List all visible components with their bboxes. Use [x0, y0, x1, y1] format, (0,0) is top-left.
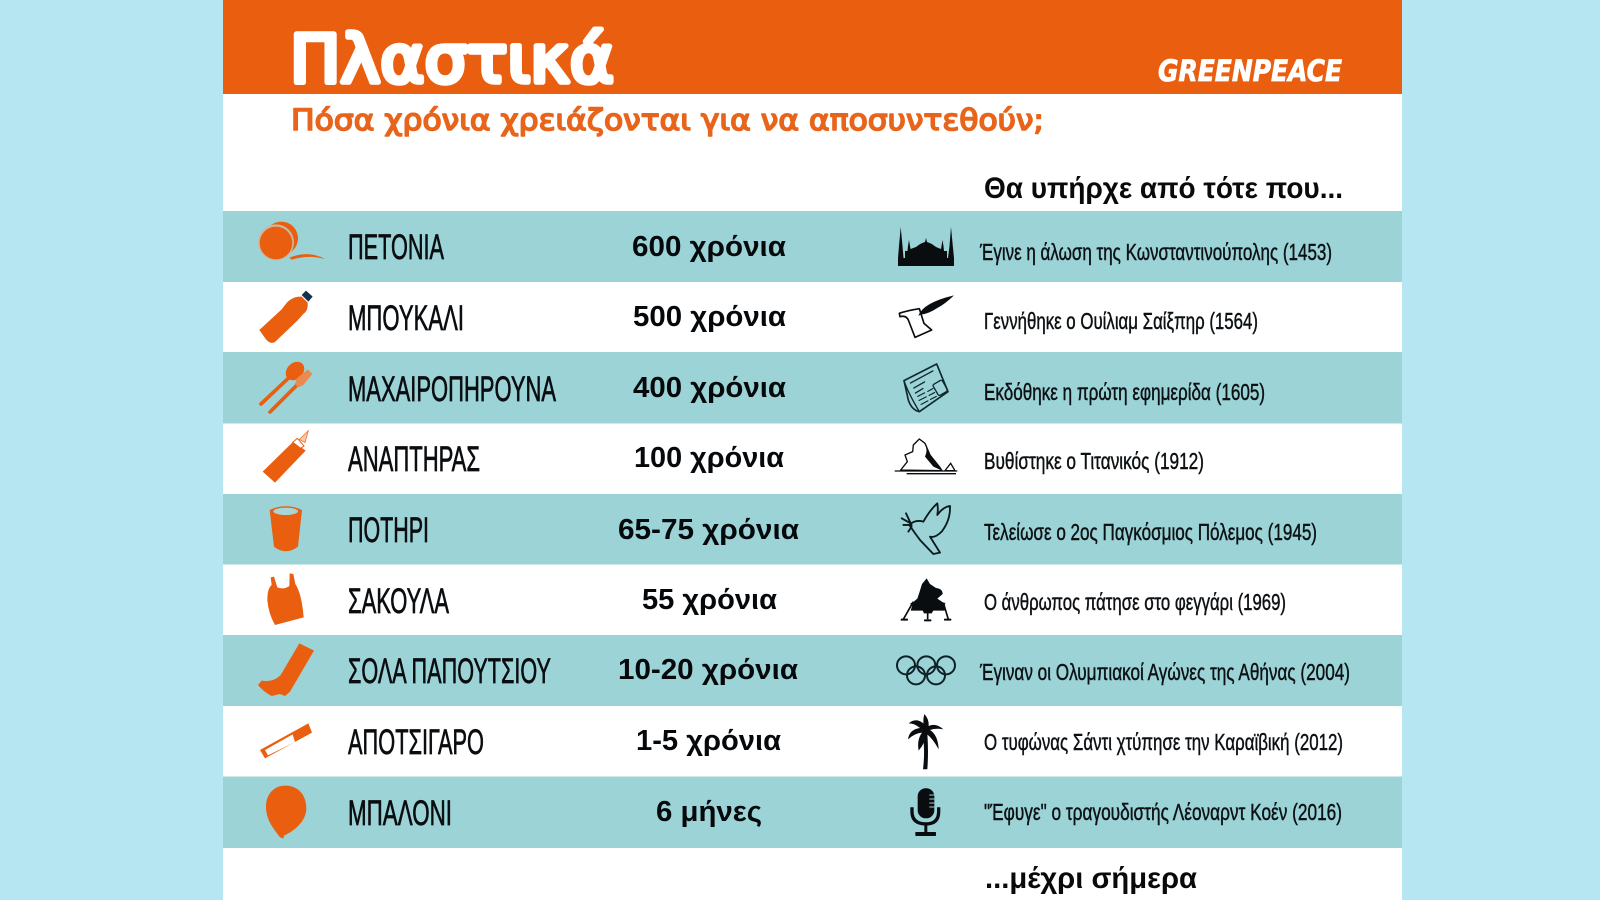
icon: microphone	[912, 788, 939, 836]
row 2: bottle: Γεννήθηκε ο Ουίλιαμ Σαίξπηρ (1564)	[984, 308, 1258, 334]
icon: balloon	[266, 786, 306, 839]
footer text: ...μέχρι σήμερα	[985, 862, 1198, 895]
teal row bands	[223, 211, 1402, 848]
subtitle: Πόσα χρόνια χρειάζονται για να αποσυντεθούν;	[291, 103, 1044, 137]
row 6: bag: ΣΑΚΟΥΛΑ	[348, 582, 449, 621]
row 1: fishing line: 600 χρόνια	[632, 231, 786, 263]
row 4: lighter: ΑΝΑΠΤΗΡΑΣ	[348, 440, 480, 479]
icon: mosque	[898, 227, 954, 266]
row 8: cigarette: 1-5 χρόνια	[636, 725, 781, 757]
row 2: bottle: ΜΠΟΥΚΑΛΙ	[348, 299, 464, 338]
row 5: cup: Τελείωσε ο 2ος Παγκόσμιος Πόλεμος (1945)	[984, 519, 1317, 545]
icon: cup	[270, 506, 302, 551]
icon: dove	[902, 503, 950, 554]
row 8: cigarette	[260, 714, 1343, 769]
icon: iceberg	[895, 439, 957, 474]
row 4: lighter	[263, 431, 1204, 483]
row 3: cutlery: Εκδόθηκε η πρώτη εφημερίδα (1605)	[984, 379, 1265, 405]
title: Πλαστικά	[290, 21, 614, 98]
column heading: Θα υπήρχε από τότε που...	[984, 172, 1343, 205]
row 5: cup	[270, 503, 1317, 554]
icon: spool of line	[258, 222, 325, 260]
icon: lighter	[263, 431, 308, 483]
row 2: bottle	[259, 291, 1258, 343]
icon: palm tree	[908, 714, 943, 769]
row 7: shoe sole: ΣΟΛΑ ΠΑΠΟΥΤΣΙΟΥ	[348, 652, 551, 691]
row 7: shoe sole: Έγιναν οι Ολυμπιακοί Αγώνες της Αθήνας (2004)	[979, 659, 1350, 685]
row 4: lighter: Βυθίστηκε ο Τιτανικός (1912)	[984, 448, 1204, 474]
header band	[223, 0, 1402, 98]
row 9: balloon: "Έφυγε" ο τραγουδιστής Λέοναρντ Κοέν (2016)	[984, 799, 1342, 825]
row 6: bag: 55 χρόνια	[642, 584, 777, 616]
row 6: bag: Ο άνθρωπος πάτησε στο φεγγάρι (1969)	[984, 589, 1286, 615]
row 9: balloon	[266, 786, 1342, 839]
row 2: bottle: 500 χρόνια	[633, 301, 786, 333]
row 1: fishing line	[258, 222, 1332, 267]
icon: bottle	[259, 291, 313, 343]
icon: lunar module	[901, 578, 951, 621]
row 9: balloon: ΜΠΑΛΟΝΙ	[348, 794, 452, 833]
row 8: cigarette: Ο τυφώνας Σάντι χτύπησε την Καραϊβική (2012)	[984, 729, 1343, 755]
row 3: cutlery	[261, 358, 1265, 412]
icon: cigarette butt	[260, 723, 312, 758]
icon: plastic bag	[267, 573, 304, 625]
row 1: fishing line: Έγινε η άλωση της Κωνσταντινούπολης (1453)	[979, 239, 1332, 265]
row 9: balloon: 6 μήνες	[656, 796, 762, 828]
row 5: cup: 65-75 χρόνια	[618, 514, 799, 546]
row 8: cigarette: ΑΠΟΤΣΙΓΑΡΟ	[348, 723, 484, 762]
icon: olympic rings	[897, 656, 955, 684]
icon: spoon and fork	[261, 358, 312, 412]
row 1: fishing line: ΠΕΤΟΝΙΑ	[348, 228, 444, 267]
row 7: shoe sole: 10-20 χρόνια	[618, 654, 798, 686]
row 3: cutlery: 400 χρόνια	[633, 372, 786, 404]
panel: main white sheet	[223, 0, 1402, 900]
row 3: cutlery: ΜΑΧΑΙΡΟΠΗΡΟΥΝΑ	[348, 370, 556, 409]
row 6: bag	[267, 573, 1286, 625]
row 4: lighter: 100 χρόνια	[634, 442, 784, 474]
icon: boot	[258, 643, 314, 696]
row 5: cup: ΠΟΤΗΡΙ	[348, 511, 429, 550]
logo: Greenpeace: GREENPEACE	[1158, 54, 1342, 88]
icon: quill and paper	[899, 295, 954, 337]
row 7: shoe sole	[258, 643, 1350, 696]
icon: newspaper	[904, 364, 948, 412]
